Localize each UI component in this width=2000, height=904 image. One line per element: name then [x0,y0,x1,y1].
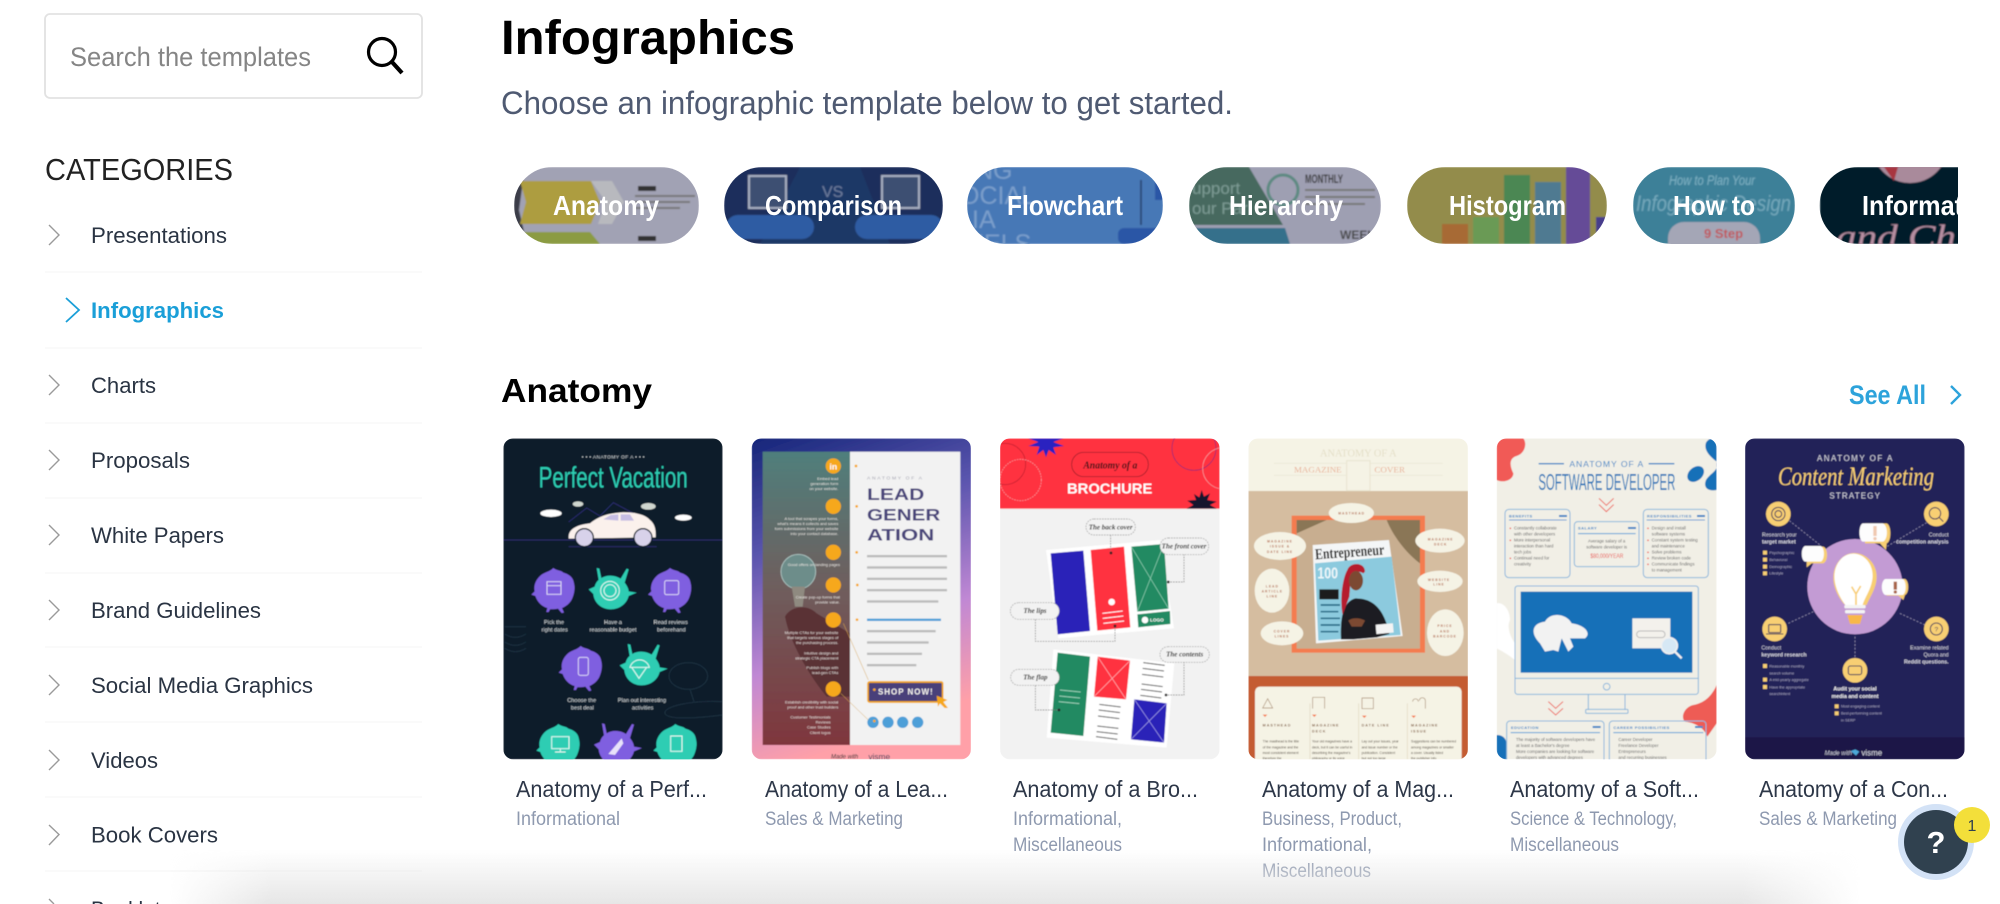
pill: how to: Infographic Design [1636,191,1791,216]
card thumbnail: magazine cover: COVER [1374,465,1405,475]
card thumbnail: magazine cover: MAGAZINE [1411,724,1438,728]
card thumbnail: software developer: Review broken code [1652,556,1691,561]
card thumbnail: content marketing: ANATOMY OF A [1817,454,1893,463]
card thumbnail: software developer: CAREER POSSIBILITIES [1613,725,1670,730]
card thumbnail: magazine cover: BARCODE [1433,634,1457,638]
card thumbnail: content marketing: target market [1762,540,1796,546]
caption: software developer [1510,776,1699,856]
card thumbnail: content marketing: Demographic [1769,565,1792,569]
card thumbnail: content marketing: Quora and [1923,653,1949,659]
card thumbnail: perfect vacation [503,438,723,769]
card thumbnail: magazine cover: MASTHEAD [1263,723,1291,727]
category list [45,223,422,904]
card thumbnail: magazine cover: WEBSITE [1428,578,1450,582]
card thumbnail: lead generation: what's means it collects and saves [777,521,838,526]
card thumbnail: lead generation: Case Studies [807,725,831,730]
pill: flowchart [967,167,1163,244]
card thumbnail: brochure: The contents [1166,651,1203,659]
card thumbnail: magazine cover: Suggestions can be numbered [1411,740,1456,744]
card thumbnail: software developer: to management [1652,568,1683,573]
card thumbnail: lead generation: the purchasing process. [796,640,838,645]
card thumbnail: magazine cover: and issue number or the [1362,745,1398,749]
pill: anatomy: Anatomy [553,190,659,221]
card thumbnail: magazine cover [1248,438,1468,767]
card thumbnail: magazine cover: 100 [1317,566,1338,583]
card thumbnail: content marketing: ? [1934,627,1938,634]
pill: how to: How to [1673,190,1755,221]
card thumbnail: software developer: SALARY [1578,526,1597,531]
card thumbnail: content marketing: in SERP [1841,718,1856,722]
card thumbnail: content marketing: Lifestyle [1769,572,1783,576]
caption: lead generation: Anatomy of a Lea... [765,776,948,802]
card thumbnail: magazine cover: ISSUE [1411,730,1427,734]
pill: how to [1633,167,1795,244]
card thumbnail: content marketing: Examine related [1910,645,1949,651]
card thumbnail: magazine cover: ISSUE & [1270,545,1290,549]
card thumbnail: software developer: software developer is [1586,544,1627,549]
card thumbnail: perfect vacation: Perfect Vacation [539,461,688,494]
card thumbnail: magazine cover: ARTICLE [1262,589,1283,593]
pill: comparison: Comparison [765,190,902,221]
card thumbnail: magazine cover: COVER [1274,629,1290,633]
caption: perfect vacation: Informational [516,809,620,830]
card thumbnail: magazine cover: describing the magazine's [1312,751,1351,755]
pill: how to: 9 Step [1704,226,1743,241]
help button: ? [1927,825,1945,860]
categories heading: CATEGORIES [45,152,233,187]
pill: flowchart: OCIAL [960,182,1035,210]
card thumbnail: lead generation: Establish credibility with social [785,699,838,704]
card thumbnail: software developer: More interpersonal [1514,538,1550,543]
card thumbnail: magazine cover: a cover. Usually listed [1411,751,1443,755]
card thumbnail: content marketing: Reasonable monthly [1769,664,1804,668]
card thumbnail: perfect vacation: beforehand [657,628,686,634]
card thumbnail: content marketing: search volume [1769,671,1794,675]
card thumbnail: software developer: developers with advanced degrees [1516,755,1583,760]
card thumbnail: software developer: Average salary of a [1588,538,1626,543]
pill: hierarchy: Hierarchy [1229,190,1343,221]
card thumbnail: content marketing: Reddit questions. [1904,660,1949,666]
card thumbnail: magazine cover: MAGAZINE [1267,539,1293,543]
card thumbnail: perfect vacation: Read reviews [654,620,688,626]
pill: informational: and Ch [1836,219,1956,256]
pill: hierarchy: MONTHLY [1305,172,1343,186]
pill: hierarchy: upport [1192,179,1240,198]
card thumbnail: software developer: SOFTWARE DEVELOPER [1538,469,1675,495]
card thumbnail: brochure [1000,438,1220,759]
card thumbnail: magazine cover: most consistent element [1263,751,1299,755]
pill: flowchart: Flowchart [1007,190,1123,221]
section heading: anatomy: Anatomy [501,372,653,409]
card thumbnail: content marketing: Behavioral [1769,558,1788,562]
card thumbnail: magazine cover: DATE LINE [1267,550,1293,554]
caption: lead generation: Sales & Marketing [765,809,903,830]
card thumbnail: lead generation: Embed lead [817,476,838,481]
pill: comparison: VS [822,184,843,201]
caption: magazine: Business, Product, [1262,809,1402,830]
card thumbnail: content marketing: Most engaging content [1841,705,1881,709]
pill: hierarchy [1189,167,1390,244]
card thumbnail: brochure: The lips [1023,607,1047,615]
caption: perfect vacation [516,776,707,830]
caption: brochure: Anatomy of a Bro... [1013,776,1198,802]
pill: anatomy [514,167,699,244]
card thumbnail: content marketing: Psychographic [1769,551,1795,555]
card thumbnail: perfect vacation: right dates [541,628,568,634]
card thumbnail: lead generation: LEAD [867,485,924,504]
caption: software developer: Anatomy of a Soft... [1510,776,1699,802]
card thumbnail: brochure: LOGO [1150,617,1164,622]
card thumbnail: magazine cover: LINE [1433,582,1445,586]
card thumbnail: magazine cover: MAGAZINE [1294,465,1342,475]
card thumbnail: content marketing: competition analysis [1896,540,1949,546]
card thumbnail: magazine cover: MAGAZINE [1428,537,1454,541]
card thumbnail: brochure: The flap [1023,673,1048,681]
card thumbnail: lead generation: Publish blogs with [806,665,838,670]
card thumbnail: software developer: and recurring businesses [1618,755,1667,760]
category list: Videos [91,748,158,773]
card thumbnail: software developer: Communicate findings [1652,562,1694,567]
card thumbnail: perfect vacation: Pick the [544,620,564,626]
active category: Infographics [91,298,224,323]
card thumbnail: software developer: Career Developer [1618,737,1653,742]
card thumbnail: perfect vacation: best deal [571,706,594,712]
card thumbnail: magazine cover: PRICE [1437,624,1453,628]
card thumbnail: magazine cover: but not too large [1362,756,1386,760]
card thumbnail: software developer: Design and install [1652,526,1686,531]
card captions [516,776,1948,882]
card thumbnail: software developer: Entrepreneurs [1618,749,1646,754]
pill: flowchart: NELS [966,230,1031,258]
card thumbnail: lead generation: on your website. [809,486,838,491]
card thumbnail: software developer: Constant system testing [1652,538,1698,543]
card thumbnail: lead generation: proof and other trust builders [787,704,838,709]
card thumbnail: lead generation: form submissions from your website [775,526,839,531]
card thumbnail: content marketing: media and content [1831,694,1879,700]
caption: content marketing [1759,776,1948,830]
card thumbnail: content marketing: Best-performing content [1841,711,1883,715]
caption: magazine: Informational, [1262,835,1372,856]
card thumbnail: perfect vacation: • • • ANATOMY OF A • • • [582,455,645,461]
see all link: See All [1849,380,1926,410]
caption: software developer: Science & Technology, [1510,809,1677,830]
pill: comparison [724,167,943,244]
card thumbnail: magazine cover: DATE LINE [1362,723,1390,727]
card thumbnail: content marketing: Research your [1762,532,1797,538]
card thumbnail: magazine cover: LEAD [1266,584,1279,588]
card thumbnail: magazine cover: DECK [1312,729,1326,733]
caption: software developer: Miscellaneous [1510,835,1619,856]
card thumbnail: software developer: More companies are looking for software [1516,749,1595,754]
card thumbnail: magazine cover: Your old magazines have a [1312,740,1352,744]
card thumbnail: lead generation: that targets various stages of [787,635,839,640]
card thumbnail: software developer: Constantly collaborate [1514,526,1557,531]
card thumbnail: software developer: and maintenance [1652,544,1685,549]
card thumbnail: software developer: RESPONSIBILITIES [1647,514,1692,519]
card thumbnail: software developer [1497,438,1717,771]
title: Infographics [501,12,795,65]
card thumbnail: content marketing: STRATEGY [1829,491,1881,500]
caption: magazine [1262,776,1454,882]
category pills [514,167,1958,244]
card thumbnail: content marketing: Content Marketing [1778,462,1934,491]
card thumbnail: magazine cover: of the magazine and the [1263,745,1299,749]
caption: content marketing: Sales & Marketing [1759,809,1897,830]
card thumbnail: software developer: interaction than hard [1514,544,1554,549]
card thumbnail: lead generation: Intuitive design and [804,650,838,655]
card thumbnail: content marketing: Audit your social [1833,687,1877,693]
card thumbnail: software developer: tech jobs [1514,550,1531,555]
card thumbnail: software developer: Continual need for [1514,556,1550,561]
search box: Search the templates [70,42,311,72]
card thumbnail: content marketing: Conduct [1761,645,1782,651]
card thumbnail: lead generation: ATION [867,526,934,545]
card thumbnail: software developer: with other developers [1514,532,1555,537]
card thumbnail: perfect vacation: Choose the [567,698,596,704]
caption: magazine: Anatomy of a Mag... [1262,776,1454,802]
card thumbnail: lead generation: into your contact database. [790,531,838,536]
caption: magazine: Miscellaneous [1262,861,1371,882]
search box [45,14,422,98]
card thumbnail: software developer: BENEFITS [1509,514,1533,519]
card thumbnail: perfect vacation: Plan out interesting [618,698,666,704]
card thumbnail: content marketing: Have the appropriate [1769,685,1805,689]
sidebar [45,14,422,904]
card thumbnail: magazine cover: publication. Consistent [1362,751,1395,755]
card thumbnail: magazine cover: The masthead is the title [1263,740,1299,744]
caption: brochure: Miscellaneous [1013,835,1122,856]
card thumbnail: lead generation: Client logos [810,730,831,735]
card thumbnail: brochure: BROCHURE [1067,482,1153,498]
pill: histogram [1407,167,1607,244]
card thumbnail: software developer: ANATOMY OF A [1569,459,1644,469]
pill: how to: How to Plan Your [1669,172,1756,188]
card thumbnail: content marketing: keyword research [1761,653,1807,659]
card thumbnail: brochure: The back cover [1089,523,1133,531]
card thumbnail: lead generation: generation form [810,481,839,486]
card thumbnail: magazine cover: among magazines or smaller [1411,745,1455,749]
card thumbnail: lead generation: ANATOMY OF A [867,475,923,481]
help button [1898,804,1990,880]
card thumbnail: software developer: software systems [1652,532,1685,537]
bottom shadow [203,863,1822,904]
card thumbnail: lead generation: SHOP NOW! [878,688,933,697]
category list: Charts [91,373,156,398]
pill: flowchart: NG [975,157,1012,185]
card thumbnail: content marketing [1745,438,1965,759]
card thumbnail: lead generation: Good offers on landing pages [788,562,840,567]
pill: informational [1820,167,1958,244]
card thumbnail: magazine cover: Entrepreneur [1314,542,1385,563]
card thumbnail: magazine cover: ANATOMY OF A [1320,449,1397,460]
category list: Book Covers [91,822,218,848]
card thumbnail: lead generation: Customer Testimonials [790,714,831,719]
category list: Social Media Graphics [91,673,313,698]
category list: Brand Guidelines [91,598,261,623]
card thumbnail: content marketing: Conduct [1929,532,1949,538]
card thumbnail: brochure: The front cover [1162,542,1207,550]
card thumbnail: magazine cover: AND [1440,629,1450,633]
card thumbnail: software developer: Freelance Developer [1618,743,1659,748]
card thumbnail: lead generation: Create pop-up forms that [796,595,841,600]
card thumbnail: magazine cover: LINE [1267,595,1278,599]
category list: Proposals [91,448,190,473]
card thumbnail: magazine cover: MAGAZINE [1312,723,1339,727]
card thumbnail: magazine cover: DECK [1434,543,1447,547]
subtitle: Choose an infographic template below to get started. [501,85,1233,121]
card thumbnail: magazine cover: philosophy or its voice [1312,756,1345,760]
card thumbnail: lead generation: Multiple CTAs for your website [785,630,839,635]
caption: brochure [1013,776,1198,856]
pill: histogram: Histogram [1449,190,1566,221]
card thumbnail: lead generation: visme [868,751,890,761]
caption: content marketing: Anatomy of a Con... [1759,776,1948,802]
card thumbnail: lead generation: A tool that scrapes your forms, [785,516,838,521]
card thumbnail: magazine cover: LINES [1275,634,1289,638]
card thumbnail: software developer: Solve problems [1652,550,1682,555]
card thumbnail: software developer: creativity [1514,562,1532,567]
pill: hierarchy: WEEKLY [1340,228,1390,242]
card thumbnail: lead generation: in [829,461,837,471]
card thumbnail: software developer: The majority of software developers have [1516,737,1596,742]
card thumbnail: perfect vacation: reasonable budget [590,628,637,634]
pill: hierarchy: our Par [1192,199,1248,218]
category list: White Papers [91,523,224,548]
card thumbnail: lead generation: Reviews [816,720,831,725]
card thumbnail: perfect vacation: Have a [604,620,623,626]
card thumbnail: lead generation: provide value. [815,600,840,605]
icon: magnifier [368,38,402,73]
card thumbnail: lead generation: lead-gen CTAs [812,670,838,675]
card thumbnail: software developer: at least a Bachelor's degree [1516,743,1570,748]
card thumbnail: content marketing: A mid-yearly aggregate [1769,678,1809,682]
card thumbnail: lead generation: Made with [831,755,859,761]
card thumbnail: software developer: $80,000/YEAR [1590,553,1623,560]
card thumbnail: lead generation: GENER [867,505,940,524]
category list: Presentations [91,223,227,248]
card thumbnail: content marketing: Made with [1825,751,1853,757]
card thumbnail: magazine cover: deck, but it can be useful in [1312,745,1352,749]
card thumbnail: lead generation: strategic CTA placement [795,655,839,660]
card thumbnail: perfect vacation: activities [632,706,654,712]
caption: perfect vacation: Anatomy of a Perf... [516,776,707,802]
caption: lead generation [765,776,948,830]
card thumbnail: content marketing: visme [1861,748,1883,757]
card thumbnail: brochure: Anatomy of a [1082,460,1138,471]
card thumbnail: content marketing: searchintent [1769,692,1791,696]
pill: flowchart: IA [972,206,996,234]
card thumbnail: magazine cover: MASTHEAD [1338,511,1365,515]
card thumbnail: software developer: EDUCATION [1511,725,1539,730]
card thumbnail: magazine cover: therefore the [1263,756,1282,760]
card thumbnail: lead generation [752,438,971,761]
card thumbnail: magazine cover: Lay out your issues, year [1362,740,1400,744]
caption: brochure: Informational, [1013,809,1122,830]
notification badge: 1 [1968,818,1977,835]
card thumbnail: magazine cover: the publisher info [1411,756,1436,760]
